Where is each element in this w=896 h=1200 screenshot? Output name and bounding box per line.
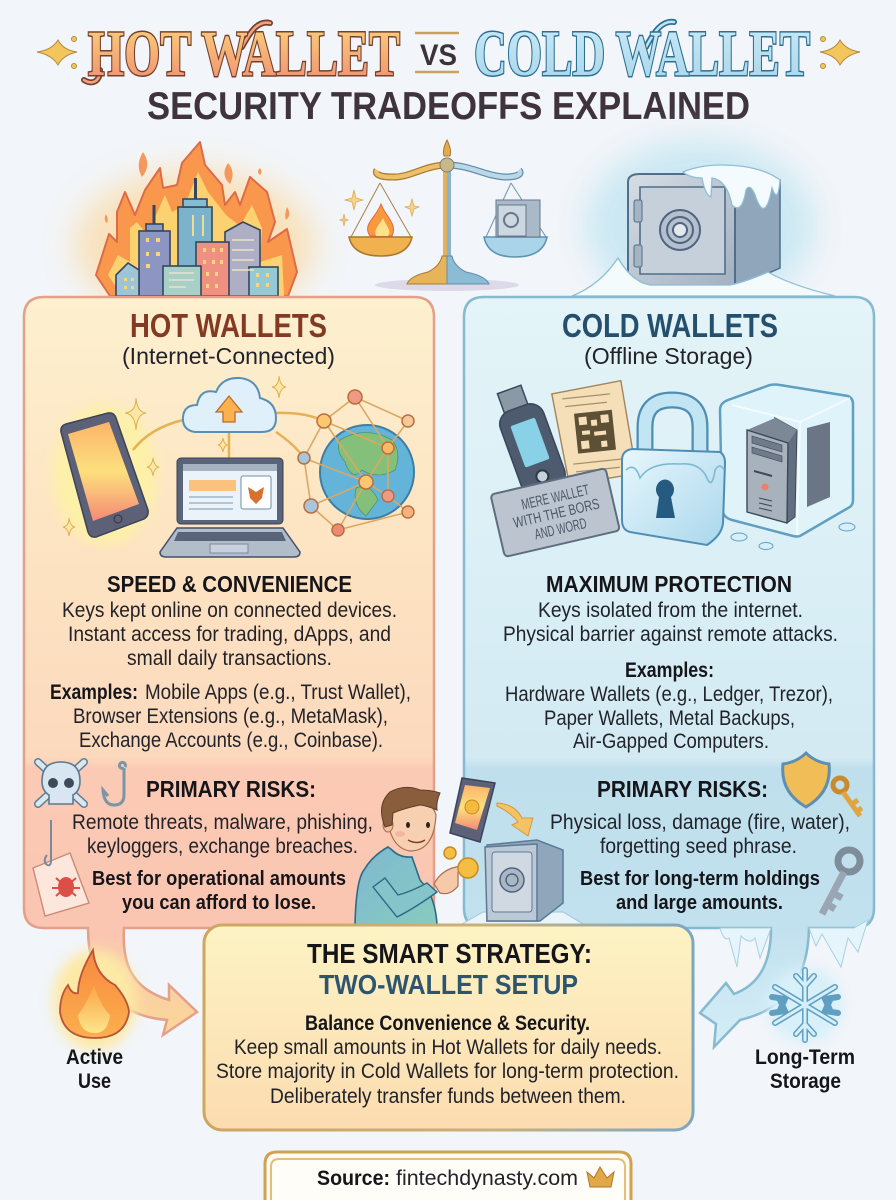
label: active use: Use	[78, 1070, 111, 1093]
paper wallet with qr code	[551, 380, 637, 485]
section: cold wallet examples: Air-Gapped Computers.	[573, 730, 769, 753]
network nodes	[304, 397, 408, 530]
section: primary risks hot: Remote threats, malware, phishing,	[72, 811, 373, 834]
scale pole and base	[407, 160, 489, 284]
right pan with safe	[484, 183, 547, 257]
source badge: Source:	[317, 1167, 390, 1190]
icon: flame active use	[53, 950, 137, 1050]
section: primary risks cold: Best for long-term holdings	[580, 867, 820, 890]
section: hot wallet examples: Exchange Accounts (e.g., Coinbase).	[79, 729, 383, 752]
strategy body text	[216, 1012, 679, 1108]
strategy body text: Store majority in Cold Wallets for long-term protection.	[216, 1060, 679, 1083]
icon: silver key	[822, 850, 860, 914]
icon: fishing hook	[103, 762, 125, 805]
panel: hot wallets	[24, 297, 434, 1035]
strategy body text: Keep small amounts in Hot Wallets for daily needs.	[234, 1036, 662, 1059]
hot wallet heading: HOT WALLET	[88, 18, 400, 90]
label: active use	[66, 1046, 123, 1093]
section: speed and convenience: Instant access for trading, dApps, and	[68, 623, 391, 646]
illustration: balance scale	[340, 140, 547, 291]
scale beam	[376, 158, 520, 177]
title: hot wallet vs cold wallet	[37, 18, 860, 90]
person body	[355, 847, 463, 925]
icon: shield	[783, 753, 829, 807]
strategy body text: Balance Convenience & Security.	[305, 1012, 590, 1035]
subtitle: SECURITY TRADEOFFS EXPLAINED	[147, 85, 750, 128]
computer in ice cube	[720, 384, 853, 536]
icicles on cold panel	[720, 920, 868, 967]
arcs	[133, 413, 324, 458]
section: speed and convenience: Keys kept online on connected devices.	[62, 599, 397, 622]
label: long-term storage: Storage	[770, 1070, 841, 1093]
strategy subheading: TWO-WALLET SETUP	[319, 969, 578, 1000]
label: long-term storage	[755, 1046, 855, 1093]
section: speed and convenience	[62, 571, 397, 670]
subheading: internet-connected: (Internet-Connected)	[122, 343, 335, 369]
icon: gold key	[833, 778, 862, 816]
icon: globe	[320, 425, 414, 519]
coins	[444, 847, 478, 878]
section: hot wallet examples: Examples:	[50, 681, 138, 704]
icon: right gold sparkle	[820, 36, 860, 68]
label: long-term storage: Long-Term	[755, 1046, 855, 1069]
section: maximum protection: MAXIMUM PROTECTION	[546, 571, 792, 597]
small sparkles	[340, 190, 419, 226]
section: cold wallet examples	[505, 659, 833, 753]
section: primary risks cold	[550, 776, 850, 914]
person head	[381, 787, 440, 851]
section: primary risks hot	[72, 776, 373, 914]
icon: phishing tag with bug	[33, 820, 89, 916]
section: primary risks cold: forgetting seed phrase.	[600, 835, 797, 858]
section: hot wallet examples	[50, 681, 411, 752]
illustration: frozen safe	[572, 140, 835, 310]
source badge: fintechdynasty.com	[396, 1167, 578, 1190]
vs badge: VS	[420, 39, 457, 72]
section: speed and convenience: SPEED & CONVENIENCE	[107, 571, 352, 597]
hardware usb wallet	[489, 381, 569, 498]
section: primary risks cold: PRIMARY RISKS:	[597, 776, 768, 802]
metal backup plate	[490, 468, 620, 557]
section: cold wallet examples: Hardware Wallets (e.g., Ledger, Trezor),	[505, 683, 833, 706]
strategy body text: Deliberately transfer funds between them.	[270, 1085, 626, 1108]
section: speed and convenience: small daily transactions.	[127, 647, 332, 670]
heading: hot wallets: HOT WALLETS	[130, 307, 327, 344]
icon: cloud	[183, 378, 276, 432]
section: primary risks hot: Best for operational amounts	[92, 867, 346, 890]
section: maximum protection	[503, 571, 838, 646]
section: maximum protection: Keys isolated from the internet.	[538, 599, 803, 622]
section: primary risks cold: Physical loss, damage (fire, water),	[550, 811, 850, 834]
panel: cold wallets	[464, 297, 874, 1047]
transfer arrow	[497, 803, 533, 836]
illustration: person moving funds	[355, 778, 583, 925]
section: primary risks hot: PRIMARY RISKS:	[146, 776, 316, 802]
left pan with flame	[349, 183, 412, 256]
subheading: offline storage: (Offline Storage)	[584, 343, 753, 369]
ice padlock	[622, 400, 725, 545]
frozen safe small	[462, 840, 583, 924]
icon: left gold sparkle	[37, 36, 77, 68]
label: active use: Active	[66, 1046, 123, 1069]
illustration: connected devices	[53, 376, 414, 557]
section: maximum protection: Physical barrier against remote attacks.	[503, 623, 838, 646]
panel: the smart strategy	[204, 925, 693, 1130]
section: hot wallet examples: Browser Extensions (e.g., MetaMask),	[73, 705, 388, 728]
section: primary risks hot: you can afford to lose.	[122, 891, 316, 914]
heading: cold wallets: COLD WALLETS	[562, 307, 778, 344]
phone with coin	[450, 778, 495, 842]
illustration: offline storage devices	[489, 380, 855, 557]
source badge	[265, 1152, 631, 1200]
gold sparkles	[63, 376, 286, 536]
icon: phone	[61, 413, 148, 537]
metal backup plate: MERE WALLET	[520, 482, 591, 514]
metal backup plate: WITH THE BORS	[512, 496, 601, 532]
section: cold wallet examples: Examples:	[625, 659, 714, 682]
icon: laptop	[160, 458, 300, 557]
section: cold wallet examples: Paper Wallets, Metal Backups,	[544, 707, 795, 730]
section: primary risks cold: and large amounts.	[616, 891, 783, 914]
strategy heading: THE SMART STRATEGY:	[307, 938, 592, 969]
illustration: burning city	[75, 142, 315, 320]
icon: skull and crossbones	[38, 762, 84, 804]
icon: crown	[587, 1167, 614, 1187]
section: hot wallet examples: Mobile Apps (e.g., Trust Wallet),	[145, 681, 411, 704]
metal backup plate: AND WORD	[533, 515, 588, 543]
water droplets	[731, 523, 855, 550]
section: primary risks hot: keyloggers, exchange breaches.	[87, 835, 358, 858]
icon: snowflake long-term storage	[767, 967, 843, 1043]
